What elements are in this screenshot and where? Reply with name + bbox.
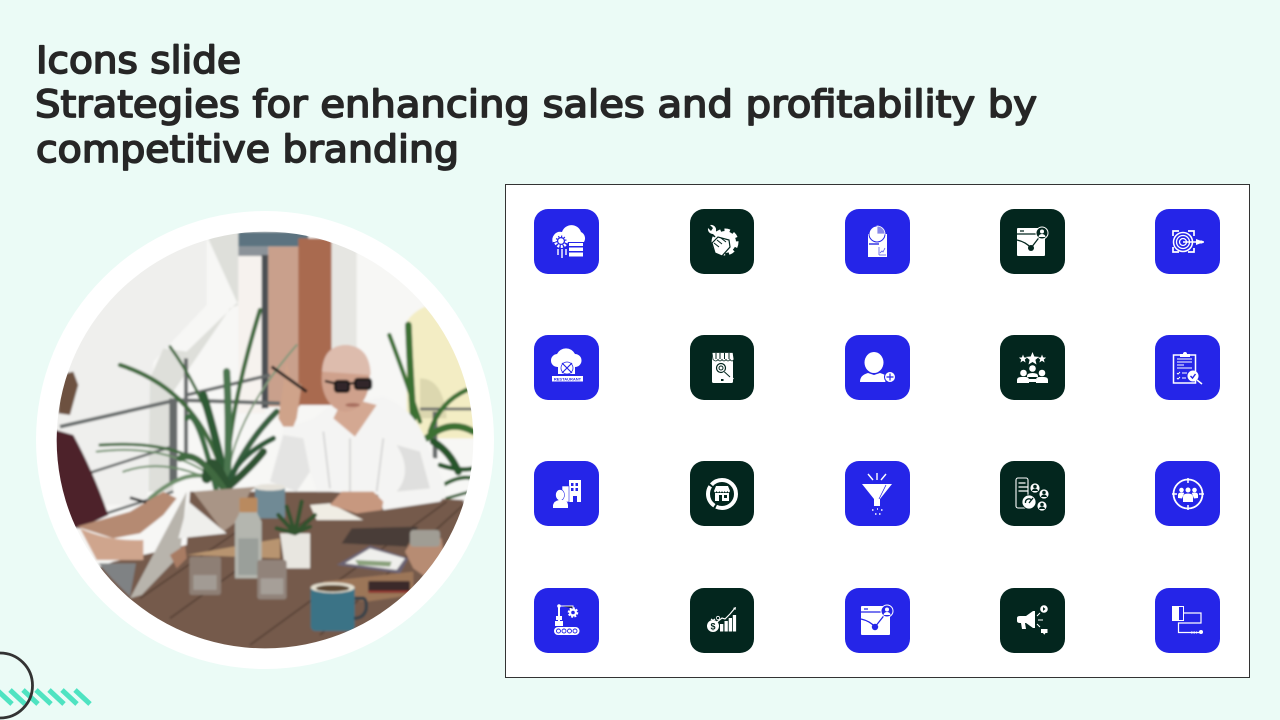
icon: team in crosshair bbox=[1155, 461, 1220, 526]
icon: person with building bbox=[534, 461, 599, 526]
tablet and folders bbox=[342, 527, 418, 547]
plant pot bbox=[280, 533, 310, 568]
phone bbox=[368, 581, 410, 593]
icon: add user bbox=[845, 335, 910, 400]
man hands bbox=[330, 492, 383, 513]
left person bbox=[50, 428, 108, 528]
icon: document with pie chart bbox=[845, 209, 910, 274]
icon: cloud gear database bbox=[534, 209, 599, 274]
icon: store in donut bbox=[690, 461, 754, 526]
icon: mobile with users bbox=[1000, 461, 1065, 526]
plant right bbox=[389, 325, 473, 498]
icon: money and growth chart: $ bbox=[710, 622, 716, 632]
icon: funnel bbox=[845, 461, 910, 526]
icon: target with arrow bbox=[1155, 209, 1220, 274]
icon: restaurant chef hat bbox=[534, 335, 599, 400]
blue mug bbox=[311, 585, 355, 631]
title: Icons slide bbox=[36, 39, 241, 82]
title: Strategies for enhancing sales and profitability by bbox=[35, 83, 1037, 126]
title bbox=[35, 39, 1037, 171]
mug grey bbox=[255, 487, 285, 518]
photo: white ring bbox=[36, 211, 494, 669]
panel: icon grid bbox=[506, 184, 1250, 678]
right hand with glass bbox=[405, 538, 443, 577]
man arm and pen bbox=[277, 383, 302, 428]
photo: meeting room bbox=[50, 225, 483, 658]
icon: restaurant chef hat: RESTAURANT bbox=[554, 376, 582, 382]
icon: wrench gear fist bbox=[690, 209, 754, 274]
icon: megaphone with media bbox=[1000, 588, 1065, 653]
icon: flow diagram bbox=[1155, 588, 1220, 653]
man shirt bbox=[376, 411, 446, 512]
bottle bbox=[235, 498, 262, 578]
laptop bbox=[130, 492, 187, 598]
railings bbox=[60, 358, 473, 513]
papers bbox=[178, 502, 227, 538]
plant left bbox=[97, 310, 297, 498]
man head bbox=[320, 371, 371, 410]
icon: mobile store search bbox=[690, 335, 754, 400]
icon: browser window with user (blue) bbox=[845, 588, 910, 653]
icon: money and growth chart bbox=[690, 588, 754, 653]
glasses bbox=[189, 557, 221, 595]
icon: browser window with user bbox=[1000, 209, 1065, 274]
title: competitive branding bbox=[36, 128, 459, 171]
decorative stripes and circle bbox=[0, 653, 90, 718]
table bbox=[100, 490, 464, 648]
icon: clipboard with check bbox=[1155, 335, 1220, 400]
icon: stars and team bbox=[1000, 335, 1065, 400]
icon: robot arm conveyor bbox=[534, 588, 599, 653]
